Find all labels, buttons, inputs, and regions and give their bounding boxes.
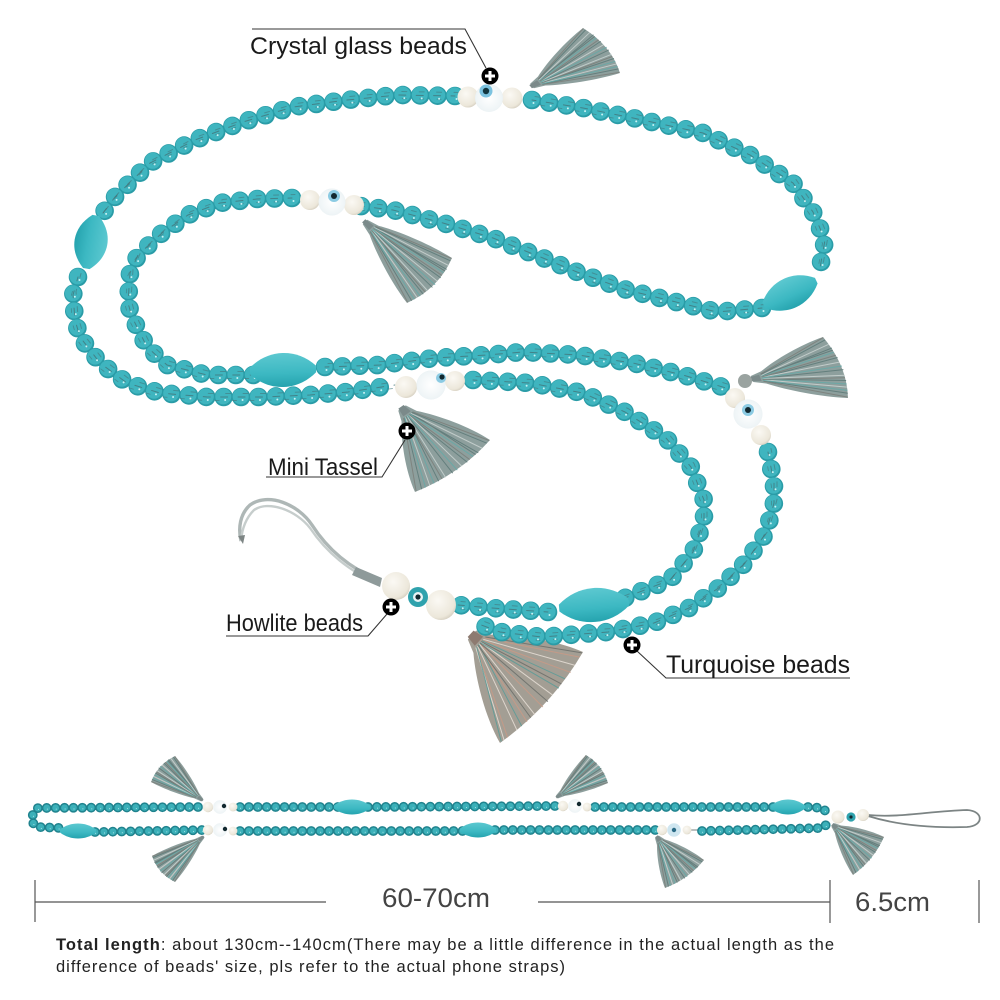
tassels: main necklace: [341, 25, 855, 748]
dimension: 6.5cm: [855, 880, 979, 923]
callout: crystal glass beads: [250, 29, 498, 84]
flat-lay strap photo: [32, 753, 980, 891]
callout: howlite beads: [226, 598, 400, 637]
strap beads: [32, 806, 831, 833]
note: total length: Total length: about 130cm--140cm(There may be a little difference in the actual length as the: [56, 936, 834, 954]
strap oval beads: [60, 800, 805, 838]
dimension: 60-70cm: [35, 880, 830, 923]
dimension: 60-70cm: 60-70cm: [382, 883, 490, 913]
note: total length: [56, 936, 834, 976]
strap tassels: [148, 753, 887, 891]
dimension: 6.5cm: 6.5cm: [855, 887, 930, 917]
note: total length: difference of beads' size, pls refer to the actual phone straps): [56, 958, 565, 976]
large oval turquoise beads: [70, 213, 823, 625]
callout: turquoise beads: [624, 636, 850, 679]
strap thin cord: [687, 829, 702, 831]
howlite and evil-eye beads: [300, 84, 771, 620]
callout: mini tassel: Mini Tassel: [268, 454, 378, 481]
callout: mini tassel: [266, 422, 416, 481]
turquoise bead strands: [70, 92, 828, 640]
strap loop: [868, 810, 980, 827]
callout: howlite beads: Howlite beads: [226, 610, 363, 637]
strap white and eye beads: [203, 799, 869, 837]
callout: crystal glass beads: Crystal glass beads: [250, 33, 467, 60]
callout: turquoise beads: Turquoise beads: [666, 651, 850, 679]
cord end with knot: [238, 500, 382, 587]
